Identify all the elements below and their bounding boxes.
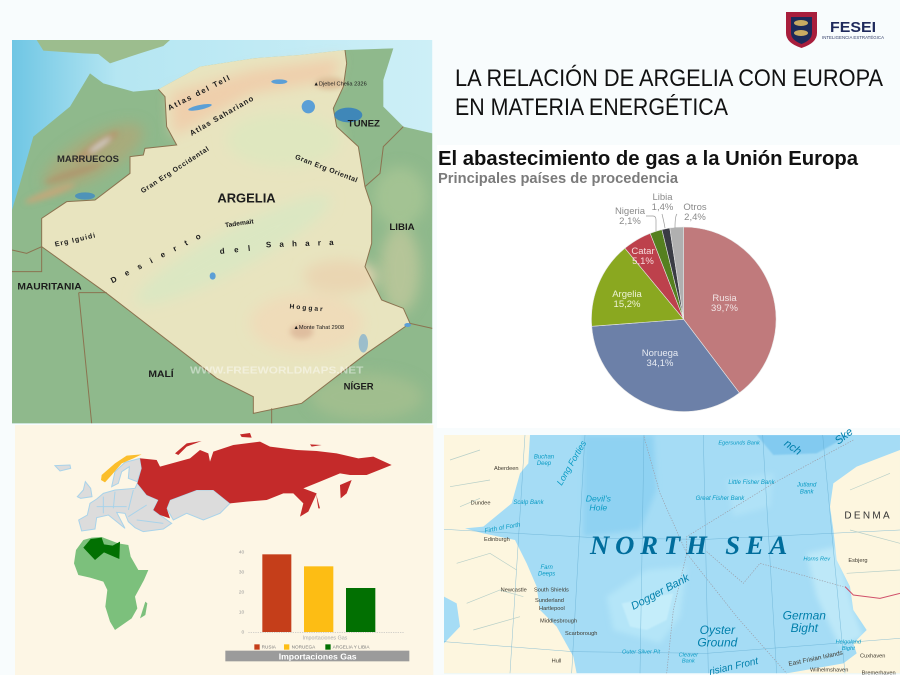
map labels: ARGELIA [217,190,276,205]
map labels: LIBIA [389,222,415,232]
sea labels: Deep [537,461,552,467]
map labels: Tademait [225,218,255,229]
place labels: Middlesbrough [540,619,577,625]
bar legend [254,644,370,650]
bar legend: ARGELIA Y LIBIA [333,645,370,650]
title [455,65,883,121]
map labels: Atlas Sahariano [188,93,256,138]
pie labels: Otros [683,202,707,213]
map labels: MALÍ [148,368,174,379]
maritime boundaries [644,437,853,673]
map labels: del [219,244,251,256]
watermark: WWW.FREEWORLDMAPS.NET [190,365,363,376]
bar legend: RUSIA [262,645,277,650]
panel: North Sea map [444,426,900,675]
place labels: Cuxhaven [860,653,885,659]
place labels: Esbjerg [848,558,868,564]
pie labels: Nigeria [615,206,646,217]
map labels: Erg Iguidi [54,232,97,249]
place labels: Sunderland [535,598,564,604]
sea labels: Bank [800,489,814,495]
sea labels: Great Fisher Bank [696,496,745,502]
sea labels: Devil's [586,493,612,503]
map labels: S a h a r a [266,238,337,249]
map labels: Atlas del Tell [166,73,233,112]
Norway [101,454,142,482]
map labels: Hoggar [289,303,325,313]
rivers [450,450,900,630]
place labels: Hartlepool [539,606,565,612]
bar chart: 10 [239,609,245,615]
map labels: Gran Erg Oriental [294,154,359,184]
place labels [471,466,896,675]
sea labels: Bank [682,659,696,665]
map labels: MAURITANIA [17,282,82,292]
Algeria territory [42,50,410,413]
map labels: Gran Erg Occidental [140,145,211,195]
pie labels: Rusia [712,293,737,304]
sea labels: Buchan [534,455,555,461]
pie labels: 15,2% [614,299,641,310]
pie chart [591,227,776,412]
sea labels: Ske [833,426,856,447]
map labels: TUNEZ [348,119,381,129]
sea labels: Oyster [700,623,736,637]
panel: gas imports map and bar chart [15,425,433,675]
place labels: Dundee [471,501,490,507]
map labels: NÍGER [344,380,374,391]
logo: FESEI: FESEI [830,19,876,36]
place labels: East Frisian Islands [788,650,843,668]
Russia [137,442,392,518]
land: Denmark and Germany [787,450,900,673]
graticule [444,435,900,673]
pie labels: 39,7% [711,303,739,314]
place labels: Hull [552,659,561,665]
bar chart: 40 [239,550,245,556]
bar chart: 20 [239,589,245,595]
bar chart: Importaciones Gas [279,651,357,661]
logo: FESEI [786,12,885,48]
sea labels [484,426,862,675]
sea labels: Deeps [538,571,555,577]
chart subheading: Principales países de procedencia [438,171,679,187]
pie labels: Noruega [642,348,679,359]
bar chart [225,550,409,661]
map: Africa [74,537,148,630]
sea labels: NORTH SEA [589,530,787,560]
Algeria and Libya [83,538,120,560]
bar chart: Importaciones Gas [303,635,348,641]
bar chart: 0 [242,630,245,636]
sea labels: Scalp Bank [513,500,545,506]
panel: physical map of Algeria [12,40,432,423]
pie labels: Catar [631,246,655,257]
pie labels: 5,1% [632,256,654,267]
place labels: Aberdeen [494,466,519,472]
map labels: MARRUECOS [57,154,119,164]
map labels: ▲Djebel Chelia 2326 [313,81,367,87]
map labels: ▲Monte Tahat 2908 [293,325,344,331]
sea labels: Cleaver [679,653,699,659]
title: EN MATERIA ENERGÉTICA [455,94,728,121]
pie labels [612,192,739,369]
sea labels: nch [782,438,803,458]
sea labels: Little Fisher Bank [728,480,776,486]
bar chart: 30 [239,570,245,576]
place labels: DENMA [844,511,892,522]
map labels [17,73,415,391]
place labels: Newcastle [501,587,527,593]
pie leader lines [646,214,677,231]
sea labels: Dogger Bank [629,572,692,613]
map: Europe [55,458,230,532]
logo: FESEI: INTELIGENCIA ESTRATÉGICA [822,34,885,41]
sea labels: Long Forties [555,438,589,487]
country borders [42,50,410,413]
sea labels: Jutland [796,483,817,489]
sea labels: Ground [697,636,738,650]
sea labels: Egersunds Bank [718,440,761,446]
chart heading: El abastecimiento de gas a la Unión Europa [438,148,859,170]
panel: gas supply pie chart [437,145,900,428]
sea labels: Firth of Forth [484,521,521,535]
pie labels: Libia [652,192,673,203]
sea labels: German [783,608,826,622]
sea labels: Horns Rev [803,557,831,563]
pie labels: 2,1% [619,216,641,227]
place labels: South Shields [534,588,569,594]
sea labels: Hole [589,503,607,513]
sea labels: Helgoland [836,639,862,645]
place labels: Scarborough [565,631,597,637]
pie labels: 2,4% [684,212,706,223]
pie labels: Argelia [612,289,642,300]
bar legend: NORUEGA [292,645,316,650]
icon: shield [786,12,817,48]
sea labels: Farn [541,565,553,571]
lakes [75,79,411,353]
sea labels: Outer Silver Pit [622,649,660,655]
place labels: Wilhelmshaven [810,668,848,674]
place labels: Edinburgh [484,537,510,543]
map labels: Desierto [109,232,202,285]
pie labels: 1,4% [652,202,674,213]
pie labels: 34,1% [647,358,674,369]
sea labels: Bight [791,621,819,635]
land: Britain [444,435,577,673]
sea labels: Bight [842,646,855,652]
